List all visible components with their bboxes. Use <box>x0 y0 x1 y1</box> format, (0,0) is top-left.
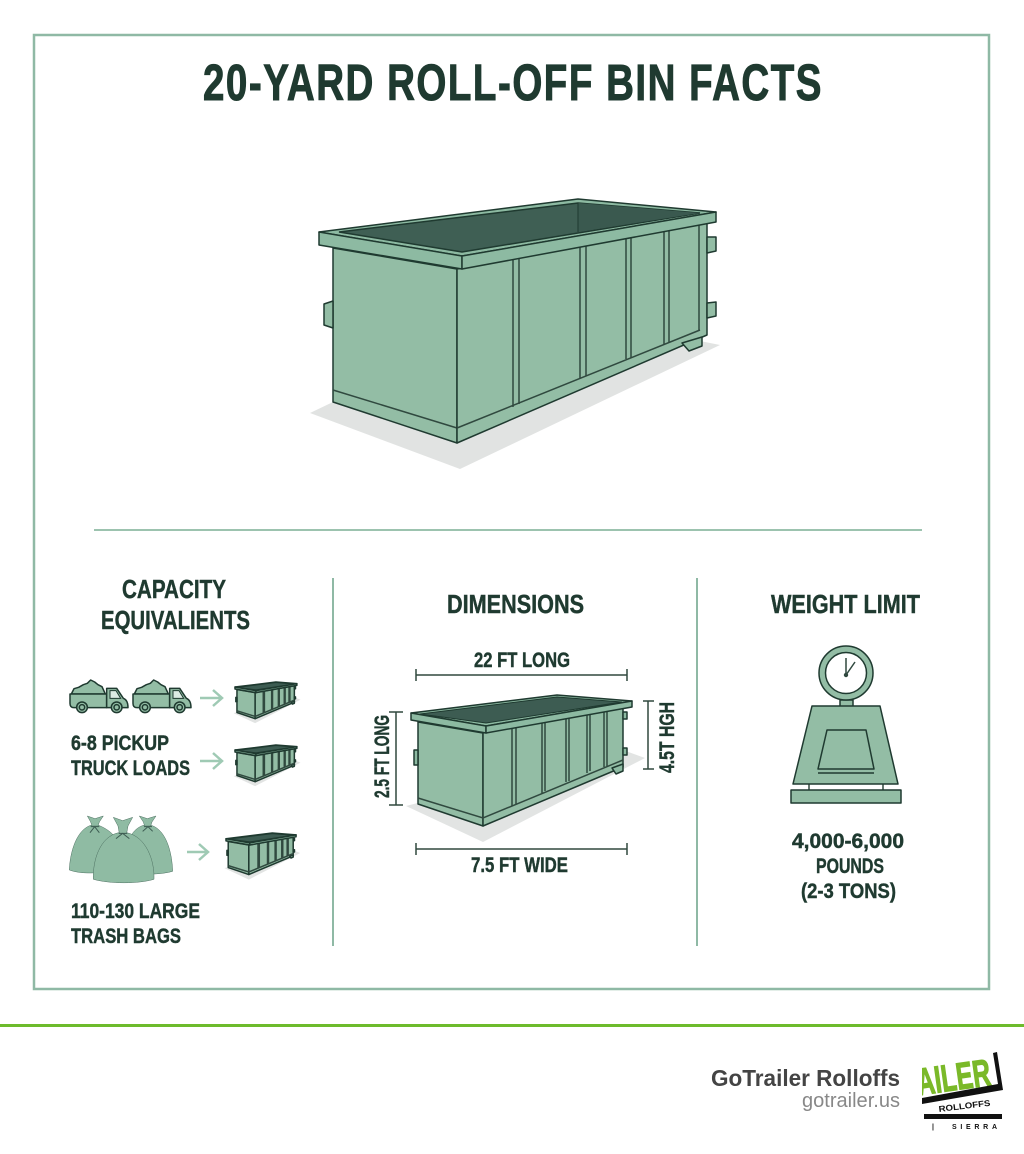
arrow <box>200 753 222 769</box>
icon: pickup truck <box>133 680 191 713</box>
bin long side <box>457 223 707 443</box>
dimension line: top <box>416 669 627 681</box>
text: pickup truck loads <box>71 732 190 780</box>
heading: weight limit: WEIGHT LIMIT <box>771 589 920 619</box>
right hinges <box>707 237 716 318</box>
text: large trash bags <box>71 900 200 948</box>
text: weight limit value: 4,000-6,000 <box>792 830 904 853</box>
text: large trash bags: 110-130 LARGE <box>71 900 200 923</box>
icon: trash bags <box>69 816 173 883</box>
illustration: dimensioned bin <box>406 695 645 842</box>
open top rim <box>319 199 716 256</box>
logo <box>922 1052 1003 1130</box>
panel: capacity equivalents <box>69 574 301 948</box>
arrow <box>200 690 222 706</box>
text: pickup truck loads: TRUCK LOADS <box>71 757 190 780</box>
outer frame <box>34 35 989 989</box>
ground shadow <box>310 340 720 469</box>
icon: small bin <box>234 682 301 723</box>
label: 2.5 ft long: 2.5 FT LONG <box>371 715 394 798</box>
label: 4.5 ft high: 4.5T HGH <box>656 702 679 773</box>
title: 20-YARD ROLL-OFF BIN FACTS <box>203 54 823 111</box>
footer brand text: GoTrailer Rolloffs <box>711 1065 900 1091</box>
footer accent line <box>0 1024 1024 1027</box>
panel: dimensions <box>371 589 679 877</box>
heading: capacity equivalents: EQUIVALIENTS <box>101 605 250 635</box>
bin left end <box>333 248 457 443</box>
footer brand text: gotrailer.us <box>802 1090 900 1112</box>
left handle <box>324 301 333 328</box>
heading: capacity equivalents: CAPACITY <box>122 574 226 604</box>
icon: pickup truck <box>70 680 128 713</box>
heading: capacity equivalents <box>101 574 250 635</box>
logo: | <box>932 1124 934 1131</box>
icon: small bin <box>234 745 301 786</box>
text: large trash bags: TRASH BAGS <box>71 925 181 948</box>
section divider <box>94 529 922 531</box>
icon: small bin <box>224 833 300 880</box>
label: 7.5 ft wide: 7.5 FT WIDE <box>471 854 568 877</box>
footer brand text <box>711 1065 900 1112</box>
text: weight limit value: (2-3 TONS) <box>801 880 896 903</box>
panel: weight limit <box>771 589 920 903</box>
heading: dimensions: DIMENSIONS <box>447 589 584 619</box>
text: weight limit value <box>792 830 904 903</box>
dimension line: bottom <box>416 843 627 855</box>
bin foot <box>682 337 702 351</box>
main roll-off bin illustration <box>310 199 720 469</box>
dimension line: left <box>389 712 403 805</box>
logo: SIERRA <box>952 1124 997 1131</box>
logo: ROLLOFFS <box>938 1098 991 1114</box>
label: 22 ft long: 22 FT LONG <box>474 649 570 672</box>
arrow <box>187 844 208 860</box>
text: pickup truck loads: 6-8 PICKUP <box>71 732 169 755</box>
dimension line: right <box>643 701 654 769</box>
icon: scale <box>791 646 901 803</box>
text: weight limit value: POUNDS <box>816 855 884 878</box>
